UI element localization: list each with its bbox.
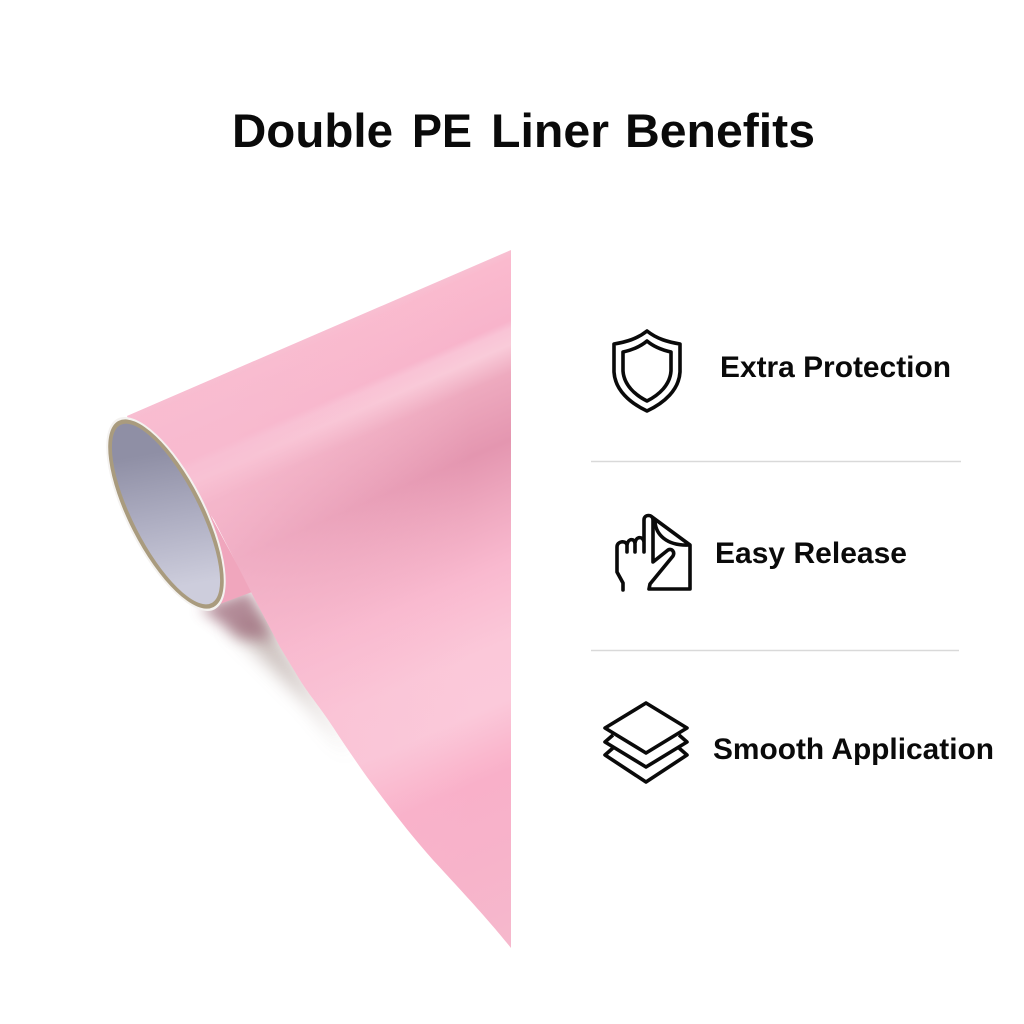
icon: hand peeling sheet bbox=[617, 516, 690, 590]
benefit: easy release bbox=[617, 516, 907, 590]
icon: stacked layers bbox=[605, 703, 687, 782]
label: Extra Protection bbox=[720, 351, 951, 384]
product image: pink vinyl roll bbox=[83, 250, 511, 948]
benefit: extra protection bbox=[614, 331, 951, 411]
title: Double bbox=[232, 104, 393, 157]
pink sheet bbox=[127, 250, 511, 948]
icon: shield bbox=[614, 331, 680, 411]
title bbox=[232, 104, 815, 157]
roll end: cardboard ring bbox=[86, 404, 246, 624]
benefit: smooth application bbox=[605, 703, 994, 782]
roll shadow bbox=[200, 590, 272, 640]
title: PE bbox=[412, 104, 472, 157]
title: Liner bbox=[491, 104, 609, 157]
label: Easy Release bbox=[715, 537, 907, 570]
roll end: white rim bbox=[83, 401, 249, 627]
roll end: inner core bbox=[91, 410, 241, 618]
long shadow along sheet edge bbox=[228, 610, 350, 755]
under layer of the sheet bbox=[195, 505, 252, 607]
label: Smooth Application bbox=[713, 733, 994, 766]
sheet shading overlay bbox=[127, 250, 511, 948]
title: Benefits bbox=[625, 104, 815, 157]
